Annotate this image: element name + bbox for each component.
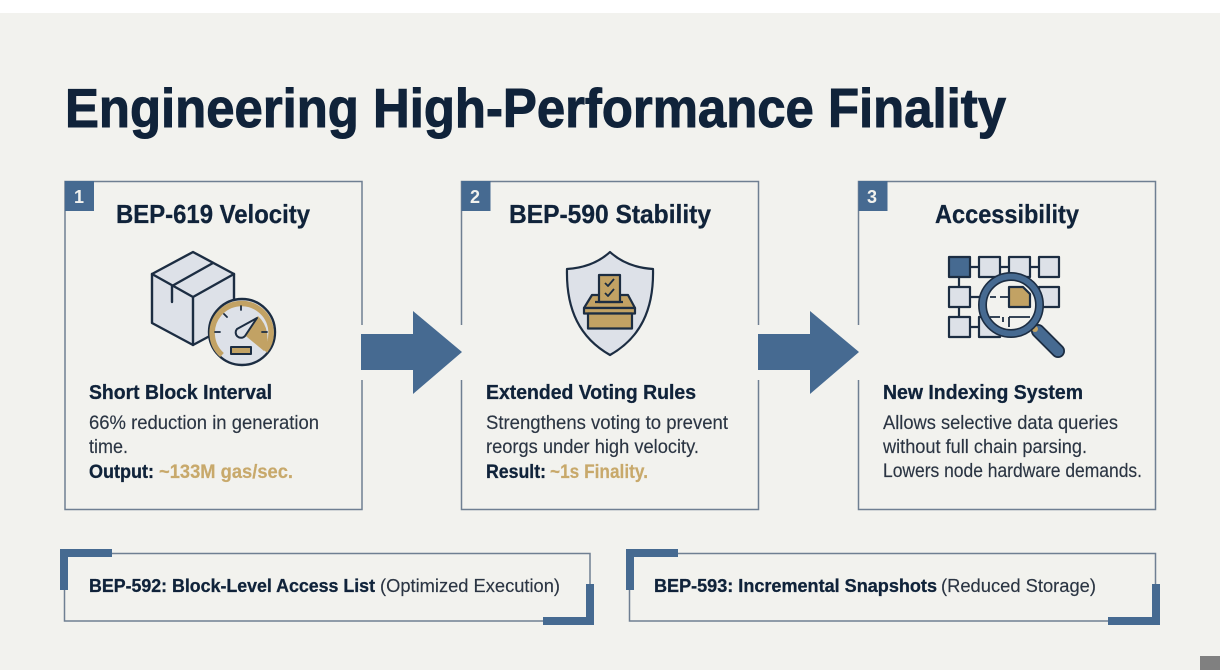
text block: New Indexing System: Allows selective data queries [883,412,1118,434]
callout text: BEP-592: (Optimized Execution) [380,576,560,596]
icon: box with speed gauge [152,252,275,365]
text block: Extended Voting Rules: ~1s Finality. [550,461,648,483]
callout text: BEP-592: BEP-592: Block-Level Access List [89,576,375,596]
panel: BEP-619 Velocity [65,181,362,510]
text block: Short Block Interval [89,382,319,483]
text block: Short Block Interval: time. [89,436,128,458]
text block: Short Block Interval: ~133M gas/sec. [159,461,293,483]
text block: Short Block Interval: 66% reduction in generation [89,412,319,434]
step badge 2: 2 [470,187,480,207]
panel: Accessibility [858,181,1156,510]
callout text: BEP-593: (Reduced Storage) [941,576,1096,596]
title: Engineering High-Performance Finality [65,77,1006,139]
text block: Short Block Interval: Output: [89,461,154,483]
callout text: BEP-593: BEP-593: Incremental Snapshots [654,576,937,596]
callout: BEP-592 [60,549,594,625]
text block: Extended Voting Rules: Extended Voting Rules [486,382,696,404]
corner marker [1200,656,1220,670]
text block: New Indexing System [882,382,1142,482]
text block: Extended Voting Rules [486,382,729,483]
text block: Extended Voting Rules: reorgs under high velocity. [486,436,699,458]
arrow: step 1 to step 2 [360,311,464,394]
callout text: BEP-593 [654,576,1096,596]
icon: shield with ballot box [567,252,653,355]
text block: Extended Voting Rules: Result: [486,461,546,483]
heading: BEP-619 Velocity: BEP-619 Velocity [116,199,310,229]
text block: New Indexing System: without full chain parsing. [882,436,1087,458]
heading: Accessibility: Accessibility [935,199,1079,229]
step badge 1: 1 [74,187,84,207]
arrow: step 2 to step 3 [757,311,861,394]
step badge 3 [858,181,888,211]
text block: New Indexing System: Lowers node hardware demands. [883,460,1142,482]
callout: BEP-593 [626,549,1160,625]
step badge 2 [462,181,490,211]
heading: BEP-590 Stability: BEP-590 Stability [509,199,712,229]
icon: indexed grid with magnifying glass [949,257,1059,351]
panel: BEP-590 Stability [462,181,758,510]
step badge 3: 3 [867,187,877,207]
callout text: BEP-592 [89,576,560,596]
text block: Short Block Interval: Short Block Interval [89,382,272,404]
text block: Extended Voting Rules: Strengthens voting to prevent [486,412,729,434]
text block: New Indexing System: New Indexing System [883,382,1083,404]
step badge 1 [65,181,94,211]
